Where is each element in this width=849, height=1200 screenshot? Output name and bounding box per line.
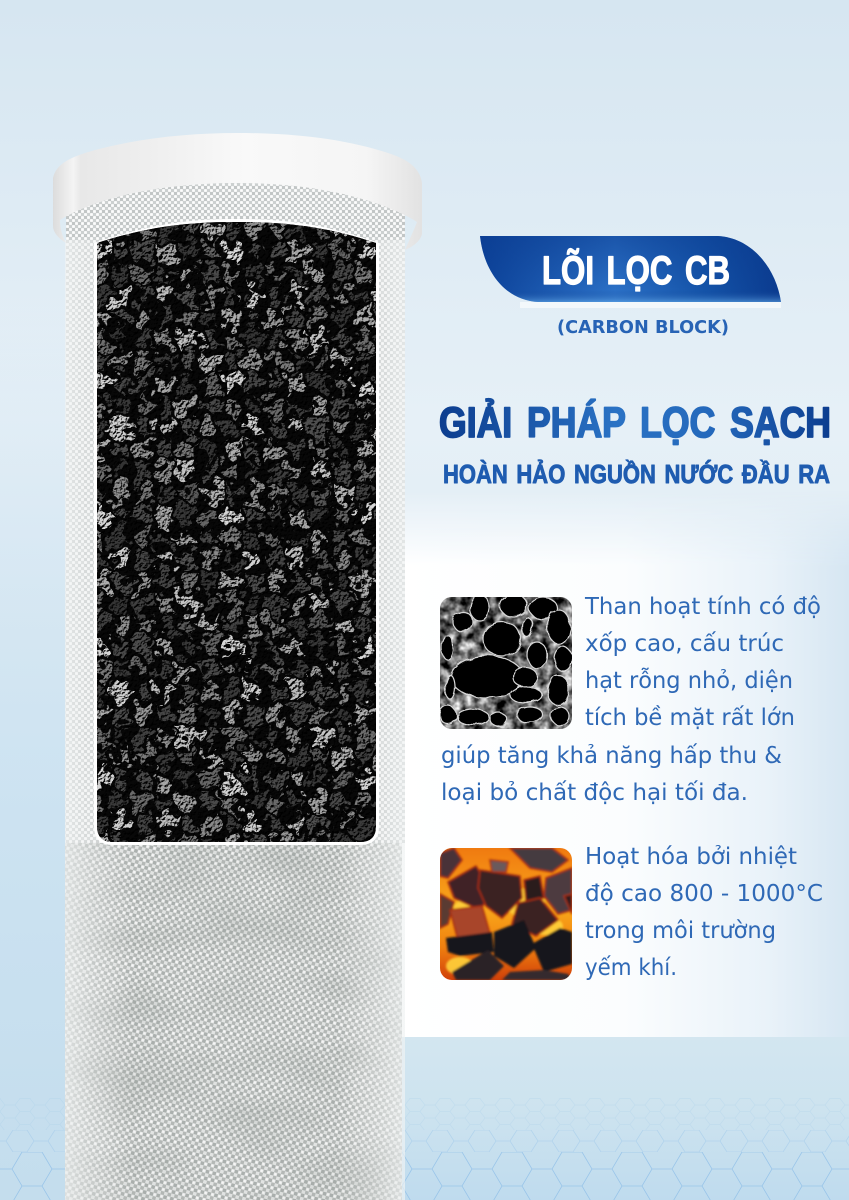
paragraph: porosity: xốp cao, cấu trúc [585, 631, 784, 657]
paragraph: activation: Hoạt hóa bởi nhiệt [585, 844, 797, 870]
paragraph: porosity: tích bề mặt rất lớn [585, 705, 795, 731]
paragraph: porosity: loại bỏ chất độc hại tối đa. [441, 780, 748, 806]
paragraph: porosity: Than hoạt tính có độ [584, 594, 821, 620]
subtitle: carbon block: (CARBON BLOCK) [557, 317, 729, 338]
paragraph: porosity [441, 594, 821, 806]
paragraph: activation [585, 844, 823, 981]
banner [480, 236, 781, 308]
cartridge white cap [53, 133, 422, 250]
cartridge mesh body [65, 180, 405, 1200]
paragraph: activation: yếm khí. [585, 955, 677, 981]
panel: white content backdrop [400, 490, 849, 1037]
banner title: LÕI LỌC CB [542, 247, 730, 293]
paragraph: porosity: hạt rỗng nhỏ, diện [585, 666, 793, 694]
paragraph: activation: trong môi trường [585, 918, 776, 944]
carbon window [94, 219, 379, 845]
icon: glowing coals [440, 848, 572, 980]
paragraph: porosity: giúp tăng khả năng hấp thu & [441, 743, 782, 769]
icon: porous carbon micrograph [440, 594, 572, 729]
filter cartridge [53, 133, 422, 1200]
paragraph: activation: độ cao 800 - 1000°C [585, 881, 823, 907]
